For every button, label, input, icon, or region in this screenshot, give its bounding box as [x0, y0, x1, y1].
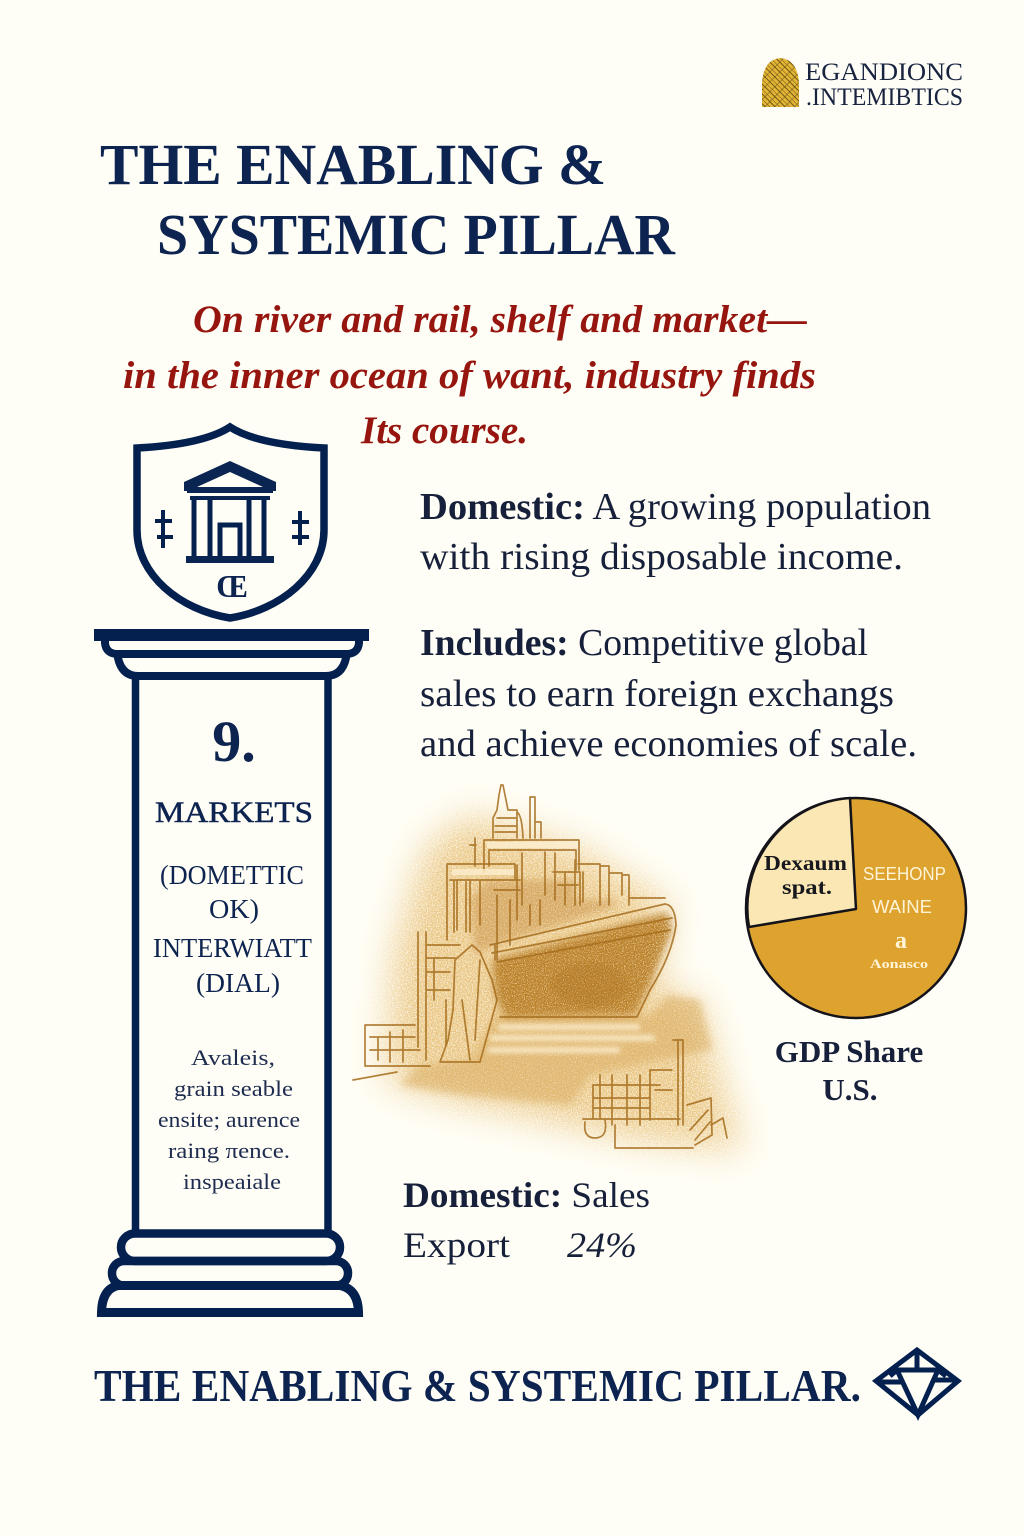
icon: shield crest — [137, 427, 324, 618]
upper frame — [487, 842, 576, 848]
pillar small text: grain seable — [174, 1076, 293, 1101]
ship superstructure — [418, 785, 676, 1062]
pillar subheading: (DIAL) — [196, 968, 280, 998]
pillar number: 9. — [212, 709, 256, 774]
pie label: dark slice: SEEHONP — [863, 864, 946, 884]
pie label: dark slice — [863, 864, 946, 971]
ground shading — [400, 995, 712, 1105]
italic subtitle: in the inner ocean of want, industry finds — [123, 354, 816, 397]
water highlights — [488, 1027, 655, 1050]
sales stats: Domestic: Sales — [403, 1175, 650, 1215]
icon: diamond — [876, 1350, 958, 1415]
hull dark shading — [552, 963, 628, 1007]
pie chart: GDP share — [746, 798, 966, 1018]
logo text — [805, 59, 963, 111]
sales stats: Export — [403, 1225, 510, 1265]
pie label: light slice — [764, 851, 848, 899]
domestic text: with rising disposable income. — [420, 536, 903, 578]
pie caption: GDP Share — [775, 1034, 923, 1069]
logo text: EGANDIONC — [805, 59, 963, 86]
pillar small text: Avaleis, — [191, 1045, 275, 1070]
icon: left cross ornament — [155, 510, 173, 548]
crest monogram: Œ — [216, 568, 248, 604]
ship hull — [492, 912, 672, 1018]
pillar subheading: INTERWIATT — [153, 933, 312, 963]
deck and bow lines — [490, 898, 676, 1017]
italic subtitle — [123, 298, 816, 452]
pillar shaft — [136, 678, 328, 1232]
left crates — [353, 1025, 430, 1080]
includes text: and achieve economies of scale. — [420, 723, 917, 765]
includes text: Includes: Competitive global — [420, 622, 868, 664]
pillar capital — [94, 629, 369, 676]
sales stats: 24% — [567, 1225, 637, 1265]
title: THE ENABLING & — [100, 132, 606, 197]
pie caption: U.S. — [822, 1072, 878, 1107]
sales stats — [403, 1175, 650, 1265]
pie caption — [775, 1034, 923, 1107]
pillar small text: inspeaiale — [183, 1169, 281, 1194]
pie label: dark slice: a — [895, 928, 907, 954]
pillar subheading: OK) — [209, 894, 259, 924]
pillar — [94, 629, 369, 1312]
pie label: light slice: spat. — [782, 875, 832, 899]
title — [100, 132, 676, 267]
logo — [762, 58, 963, 111]
icon: right cross ornament — [292, 511, 309, 545]
italic subtitle: On river and rail, shelf and market— — [193, 298, 807, 341]
pillar base — [102, 1234, 358, 1312]
lower left frame — [452, 869, 515, 875]
pillar small text: raing πence. — [168, 1138, 290, 1163]
icon: temple — [184, 461, 276, 563]
title: SYSTEMIC PILLAR — [157, 202, 676, 267]
pillar small text — [158, 1045, 300, 1194]
footer heading: THE ENABLING & SYSTEMIC PILLAR. — [94, 1360, 861, 1411]
right crates — [583, 1040, 727, 1148]
pillar small text: ensite; aurence — [158, 1107, 300, 1132]
includes text: sales to earn foreign exchangs — [420, 673, 894, 715]
logo text: .INTEMIBTICS — [806, 84, 963, 111]
ladder and figure — [418, 932, 460, 1060]
domestic text: Domestic: A growing population — [420, 486, 931, 528]
icon: woven arch — [762, 58, 799, 107]
pillar heading: MARKETS — [155, 796, 313, 829]
pie label: dark slice: WAINE — [872, 897, 932, 917]
includes text — [420, 622, 917, 765]
italic subtitle: Its course. — [360, 409, 528, 452]
pillar subheading — [153, 860, 312, 998]
pillar subheading: (DOMETTIC — [160, 860, 304, 890]
pie label: light slice: Dexaum — [764, 851, 848, 875]
illustration: cargo ship sketch — [353, 785, 745, 1150]
sepia haze — [385, 815, 745, 1150]
pie label: dark slice: Aonasco — [870, 956, 928, 971]
tower — [493, 785, 541, 838]
domestic text — [420, 486, 931, 578]
